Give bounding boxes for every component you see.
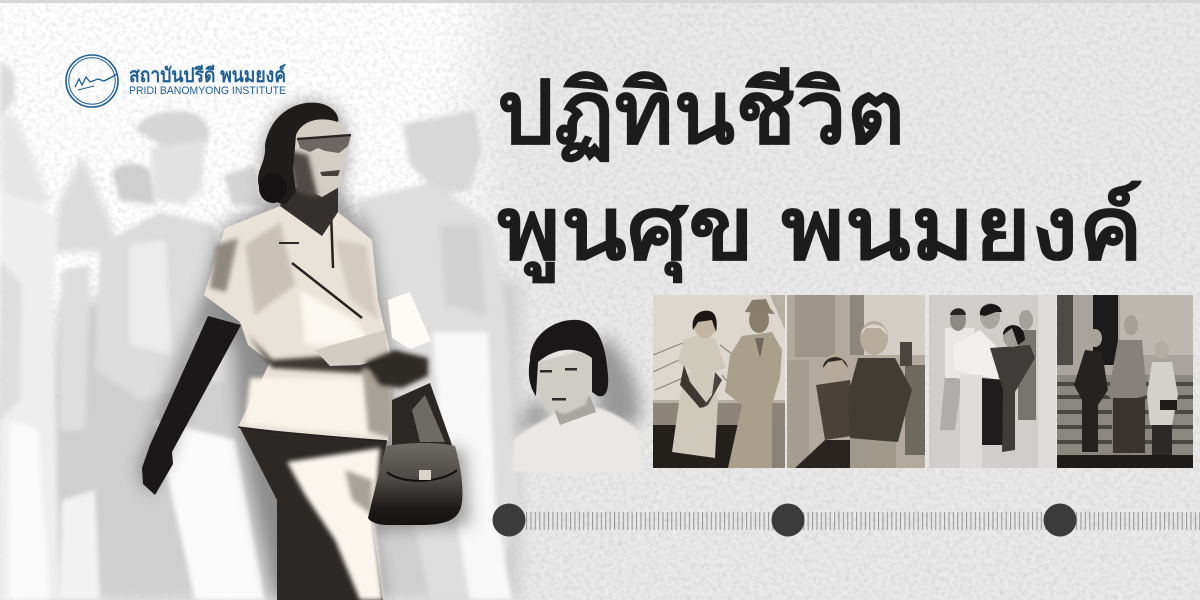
tall man in grey suit xyxy=(1108,315,1147,455)
man in dark suit xyxy=(1074,329,1108,452)
pale columns xyxy=(1038,295,1056,468)
title xyxy=(497,63,1143,284)
woman embracing: dark dress xyxy=(990,325,1035,452)
jacket xyxy=(204,206,392,441)
man in back left xyxy=(940,308,975,430)
foliage xyxy=(905,365,925,455)
hand holding book xyxy=(365,350,428,388)
skirt xyxy=(240,428,387,600)
facial features xyxy=(540,368,577,400)
ghost: grey lower ground xyxy=(40,280,520,600)
ghost: tree xyxy=(52,155,118,252)
doorway xyxy=(1093,295,1118,365)
man embracing: white shirt xyxy=(960,303,1003,468)
ghost: centre soldier xyxy=(58,111,265,600)
woman in pale coat xyxy=(1147,341,1178,455)
figure soft shadow xyxy=(138,102,470,600)
skirt grey fold xyxy=(345,470,372,515)
foliage left xyxy=(1057,295,1073,365)
title line 1: ปฏิทินชีวิต xyxy=(497,63,905,163)
window xyxy=(900,342,912,366)
photo: couple beside ship's lifeboat xyxy=(653,295,785,468)
white wash at upper left xyxy=(0,0,500,330)
stone wall right xyxy=(1120,295,1193,355)
blouse xyxy=(512,408,642,472)
man at back right xyxy=(1018,310,1036,420)
belt bow xyxy=(315,330,388,366)
jacket shadows xyxy=(210,222,392,438)
timeline xyxy=(492,504,1200,536)
skirt light streak xyxy=(287,448,383,600)
man in light suit with hat xyxy=(725,299,782,468)
ghost: left soldier xyxy=(0,60,60,600)
face shade xyxy=(288,150,318,198)
ghost: right soldier xyxy=(358,110,520,600)
central figure: Poonsuk Banomyong walking xyxy=(138,102,470,600)
neck xyxy=(280,180,338,236)
building pillars xyxy=(795,295,835,357)
timeline dot 1 xyxy=(492,504,526,536)
handbag strap xyxy=(392,383,452,445)
hair and bun xyxy=(258,103,338,205)
shadow under hull xyxy=(653,403,785,425)
portrait vignette xyxy=(515,335,640,435)
seated woman xyxy=(795,354,851,468)
title line 2: พูนศุข พนมยงค์ xyxy=(497,179,1143,284)
stone steps xyxy=(1057,375,1193,468)
portrait: young Poonsuk xyxy=(512,320,642,472)
logo: Pridi Banomyong Institute xyxy=(66,55,286,107)
timeline dot 2 xyxy=(772,504,804,536)
photo: seated woman with older man in Chinese jacket xyxy=(787,295,925,468)
logo Thai name: สถาบันปรีดี พนมยงค์ xyxy=(129,64,286,87)
ghost: far-left tree xyxy=(0,110,50,210)
timeline ticks xyxy=(526,512,1200,530)
ghost photo: soldiers behind the central figure xyxy=(0,60,520,600)
face xyxy=(290,116,348,197)
lips xyxy=(320,170,340,176)
left wall xyxy=(787,360,809,468)
woman in pale dress xyxy=(672,311,726,458)
lifeboat hull xyxy=(653,295,785,400)
man in dark jacket xyxy=(848,321,912,468)
hair xyxy=(529,320,608,396)
timeline dot 3 xyxy=(1044,504,1076,536)
glasses xyxy=(297,135,351,153)
handbag xyxy=(368,443,462,525)
neck xyxy=(552,395,596,425)
face xyxy=(534,348,594,414)
carried book xyxy=(388,292,431,349)
photo: embrace at the airport xyxy=(929,295,1056,468)
logo seal xyxy=(66,55,118,107)
dark arm and glove xyxy=(142,316,241,495)
logo English name: PRIDI BANOMYONG INSTITUTE xyxy=(129,85,286,97)
photo: three people on the stairs xyxy=(1057,295,1193,468)
